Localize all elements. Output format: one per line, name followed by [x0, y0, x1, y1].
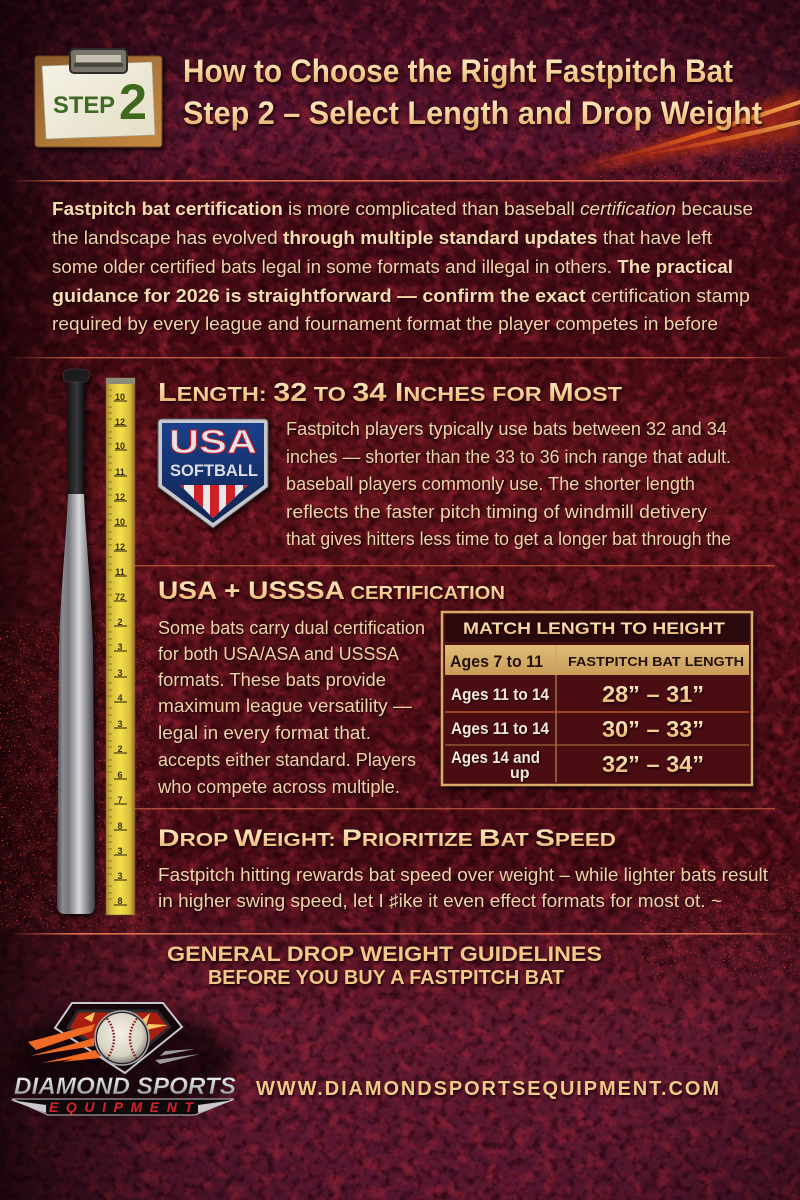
logo diamond emblem [28, 1003, 200, 1073]
clipboard metal clip [70, 49, 127, 73]
step number: 2 [119, 74, 147, 130]
table row 3: up [510, 765, 530, 782]
intro text block: the landscape has evolved through multiple standard updates that have left [52, 228, 712, 248]
illustration: measuring tape: 6 [117, 770, 123, 780]
logo baseball [95, 1011, 149, 1065]
title [183, 53, 762, 131]
certification text block: Some bats carry dual certification [158, 618, 425, 638]
fire streak accent [555, 88, 800, 172]
intro text block: required by every league and fournament format the player competes in before [52, 314, 718, 334]
length text block: inches — shorter than the 33 to 36 inch range that adult. [286, 447, 731, 467]
step label: STEP [53, 92, 115, 119]
heading: length: LENGTH: 32 TO 34 I NCHES FOR MOST [158, 377, 622, 407]
table: match length to height [442, 612, 752, 785]
table row 2: 30” – 33” [602, 716, 704, 742]
illustration: measuring tape: 7 [117, 795, 123, 805]
shield flag stripes [180, 485, 248, 518]
drop weight text block: Fastpitch hitting rewards bat speed over weight – while lighter bats result [158, 865, 768, 885]
clipboard paper [42, 62, 155, 139]
table title [445, 614, 749, 642]
certification text block: who compete across multiple. [157, 777, 400, 797]
intro text block [52, 199, 753, 334]
table row 2: Ages 11 to 14 [451, 719, 549, 738]
table row 1: Ages 11 to 14 [451, 685, 549, 704]
table header row: Ages 7 to 11 [450, 652, 543, 671]
bat grip [67, 378, 85, 494]
intro text block: Fastpitch bat certification is more complicated than baseball certification because [52, 199, 753, 219]
illustration: measuring tape: 12 [115, 492, 125, 502]
length text block: that gives hitters less time to get a longer bat through the [286, 529, 731, 549]
illustration: measuring tape: 3 [117, 668, 123, 678]
table row 2 [451, 716, 704, 742]
certification text block: accepts either standard. Players [158, 750, 416, 770]
table row 3: Ages 14 and [451, 748, 540, 767]
bat knob [63, 369, 90, 382]
table row 1 [451, 681, 704, 707]
drop weight text block: in higher swing speed, let I ♯ike it even effect formats for most ot. ~ [158, 891, 722, 911]
badge: USA Softball shield: USA [169, 423, 257, 460]
illustration: measuring tape: 3 [117, 719, 123, 729]
table header row: FASTPITCH BAT LENGTH [568, 654, 744, 669]
intro text block: some older certified bats legal in some formats and illegal in others. The practical [52, 257, 733, 277]
illustration: measuring tape: 10 [115, 392, 125, 402]
illustration: measuring tape: 10 [115, 517, 125, 527]
table title: MATCH LENGTH TO HEIGHT [463, 619, 726, 638]
length text block [286, 419, 731, 549]
website url: WWW.DIAMONDSPORTSEQUIPMENT.COM [256, 1078, 719, 1100]
guidelines heading: GENERAL DROP WEIGHT GUIDELINES [167, 943, 602, 966]
illustration: measuring tape: 10 [115, 441, 125, 451]
guidelines heading: BEFORE YOU BUY A FASTPITCH BAT [208, 967, 564, 989]
icon: step 2 clipboard [35, 49, 162, 147]
table row 1: 28” – 31” [602, 681, 704, 707]
title: How to Choose the Right Fastpitch Bat [183, 53, 733, 89]
length text block: baseball players commonly use. The shorter length [286, 474, 695, 494]
logo: Diamond Sports Equipment [10, 1003, 236, 1118]
table row 3: 32” – 34” [602, 751, 704, 777]
logo wordmark: DIAMOND SPORTS [14, 1073, 236, 1100]
drop weight text block [158, 865, 768, 911]
bat barrel [57, 492, 95, 914]
illustration: measuring tape: 12 [115, 542, 125, 552]
heading: drop weight: DROP W EIGHT: PRIORITIZE BAT SPEED [158, 825, 616, 852]
certification text block [157, 618, 425, 797]
badge: USA Softball shield: SOFTBALL [170, 461, 258, 480]
badge: USA Softball shield [158, 419, 268, 528]
certification text block: legal in every format that. [158, 723, 371, 743]
illustration: measuring tape: 72 [115, 592, 125, 602]
table row 3 [451, 748, 704, 782]
illustration: measuring tape: 2 [117, 617, 123, 627]
illustration: measuring tape: 3 [117, 846, 123, 856]
length text block: Fastpitch players typically use bats between 32 and 34 [286, 419, 727, 439]
illustration: measuring tape: 11 [115, 567, 125, 577]
heading: certification: USA + USSSA CERTIFICATION [158, 577, 505, 605]
illustration: measuring tape [106, 378, 135, 915]
illustration: measuring tape: 2 [117, 744, 123, 754]
title: Step 2 – Select Length and Drop Weight [183, 95, 762, 131]
illustration: measuring tape: 4 [117, 693, 123, 703]
guidelines heading [167, 943, 602, 989]
length text block: reflects the faster pitch timing of windmill detivery [286, 502, 707, 522]
illustration: measuring tape: 3 [117, 871, 123, 881]
illustration: baseball bat [57, 369, 95, 914]
logo subtitle: EQUIPMENT [49, 1099, 194, 1115]
illustration: measuring tape: 8 [117, 896, 123, 906]
certification text block: formats. These bats provide [158, 670, 386, 690]
certification text block: maximum league versatility — [158, 696, 412, 716]
table header row [445, 645, 749, 675]
illustration: measuring tape: 12 [115, 417, 125, 427]
illustration: measuring tape: 11 [115, 467, 125, 477]
illustration: measuring tape: 3 [117, 642, 123, 652]
illustration: measuring tape: 8 [117, 821, 123, 831]
certification text block: for both USA/ASA and USSSA [158, 644, 399, 664]
intro text block: guidance for 2026 is straightforward — confirm the exact certification stamp [52, 286, 750, 306]
